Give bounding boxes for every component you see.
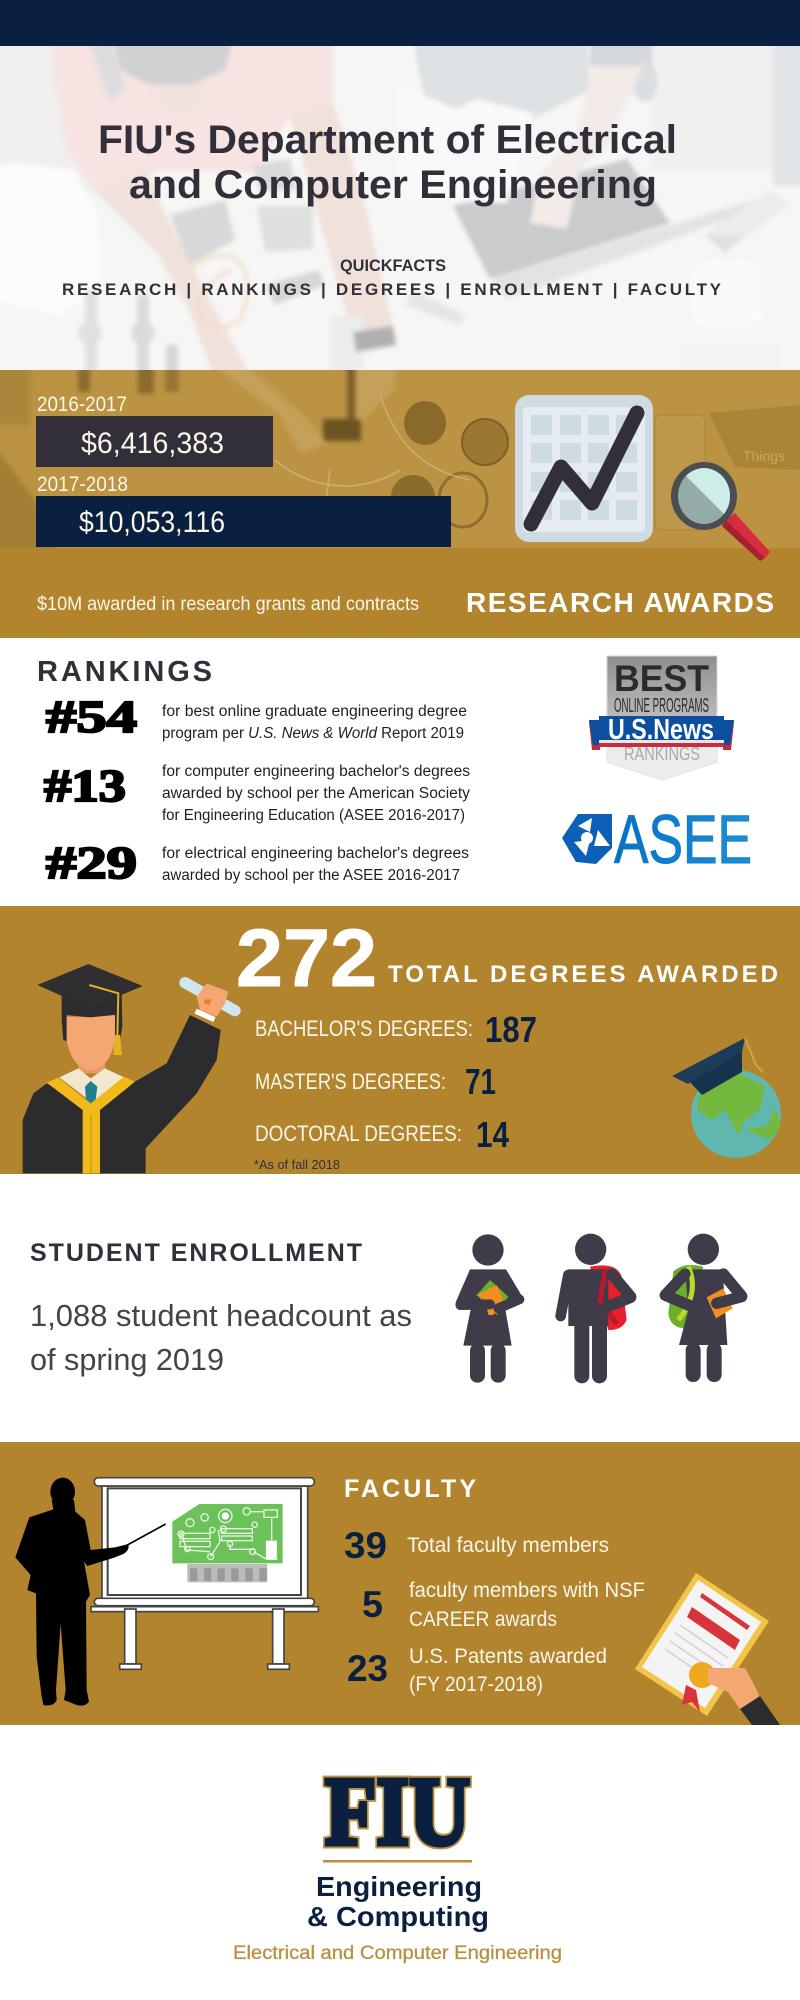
text: rank 29 description: for electrical engineering bachelor's degrees [162,845,469,862]
stat: patents: (FY 2017-2018) [409,1673,543,1696]
text: rank 29 description [162,845,469,884]
logo: engineering and computing [307,1871,489,1932]
stat: total faculty [344,1525,609,1566]
footnote: *As of fall 2018 [254,1157,340,1172]
stat: total faculty: Total faculty members [407,1534,609,1557]
stat: doctoral degrees: 14 [476,1114,509,1155]
stat: patents [347,1645,607,1696]
text: rank 13 description [162,763,470,824]
stat: NSF career: faculty members with NSF [409,1579,645,1602]
subtitle: quickfacts: RESEARCH | RANKINGS | DEGREES | ENROLLMENT | FACULTY [62,280,722,299]
text: rank 13 description: for Engineering Education (ASEE 2016-2017) [162,807,465,824]
rank: 54: #54 [46,691,137,742]
logo: FIU [233,1758,562,1964]
icon: globe with graduation cap [672,1038,781,1158]
value: 2017-2018: $10,053,116 [79,506,225,539]
icon: growth chart [515,395,653,542]
text: rank 29 description: awarded by school per the ASEE 2016-2017 [162,867,460,884]
icon: student with red backpack [561,1234,631,1383]
stat: master's degrees [255,1061,496,1102]
icon: student figures [455,1234,742,1383]
text: rank 54 description [162,703,467,742]
stat: NSF career: 5 [362,1584,383,1625]
stat: bachelor's degrees: BACHELOR'S DEGREES: [255,1016,473,1041]
rank: 13: #13 [44,760,126,811]
bar chart: research funding [36,393,451,547]
icon: ASEE logo [562,801,752,878]
icon: student with green backpack [665,1234,742,1382]
icon: US News badge: BEST [614,658,709,699]
title [98,118,677,207]
icon: presenter silhouette [15,1478,166,1706]
bar: 2017-2018 [36,496,451,547]
subtitle: quickfacts: QUICKFACTS [340,256,446,275]
number: total degrees: 272 [236,913,377,1004]
text: photo label: Things [743,448,785,464]
panel: rankings [37,656,470,888]
heading: faculty: FACULTY [344,1475,476,1503]
text: headcount: 1,088 student headcount as [30,1298,412,1333]
stat: NSF career: CAREER awards [409,1608,557,1631]
icon: presentation board [91,1478,318,1669]
panel: degrees [0,906,800,1174]
logo: FIU: FIU [325,1758,470,1866]
panel: header photo [0,40,800,375]
stat: master's degrees: 71 [465,1061,496,1102]
logo: engineering and computing: Engineering [316,1871,482,1902]
subtitle: quickfacts [62,256,722,299]
top navy bar [0,0,800,46]
logo: engineering and computing: & Computing [307,1901,489,1932]
title: FIU's Department of Electrical [98,118,677,162]
icon: magnifying glass [671,462,770,561]
stat: patents: U.S. Patents awarded [409,1645,607,1668]
icon: US News badge: RANKINGS [624,744,700,764]
icon: circuit board [172,1504,283,1582]
bar: 2016-2017 [36,416,273,467]
heading: rankings: RANKINGS [37,656,212,688]
heading: student enrollment: STUDENT ENROLLMENT [30,1239,362,1267]
text: headcount [30,1298,412,1377]
panel: faculty [0,1442,800,1725]
text: headcount: of spring 2019 [30,1342,224,1377]
text: rank 13 description: for computer engineering bachelor's degrees [162,763,470,780]
logo: department name: Electrical and Computer Engineering [233,1943,562,1964]
label: 2016-2017: 2016-2017 [37,393,127,416]
stat: doctoral degrees: DOCTORAL DEGREES: [255,1121,462,1146]
panel: student enrollment [30,1234,742,1383]
logo rule [323,1860,472,1862]
title: and Computer Engineering [129,163,657,207]
stat: master's degrees: MASTER'S DEGREES: [255,1069,446,1094]
stat: bachelor's degrees: 187 [485,1009,537,1050]
stat: NSF career [362,1579,645,1631]
stat: bachelor's degrees [255,1009,537,1050]
icon: student with books [455,1234,524,1383]
icon: ASEE logo: ASEE [614,801,752,878]
text: rank 13 description: awarded by school per the American Society [162,785,470,802]
stat: patents: 23 [347,1648,388,1689]
icon: certificate and hand [635,1573,780,1725]
icon: US News badge [589,656,734,780]
text: research summary: $10M awarded in research grants and contracts [37,594,419,615]
label: 2017-2018: 2017-2018 [37,473,128,496]
heading: total degrees awarded: TOTAL DEGREES AWARDED [388,961,778,988]
text: rank 54 description: for best online graduate engineering degree [162,703,467,720]
panel: research awards photo band [0,365,800,555]
rank: 29: #29 [46,837,137,888]
stat: doctoral degrees [255,1114,509,1155]
text: rank 54 description: program per U.S. News & World Report 2019 [162,725,464,742]
icon: graduate figure [23,964,235,1173]
icon: US News badge: U.S.News [608,714,714,746]
stat: total faculty: 39 [344,1525,387,1566]
panel: research awards footer [0,548,800,638]
logo: FIU: FIU [325,1758,470,1866]
value: 2016-2017: $6,416,383 [81,427,224,460]
heading: research awards: RESEARCH AWARDS [466,587,774,618]
